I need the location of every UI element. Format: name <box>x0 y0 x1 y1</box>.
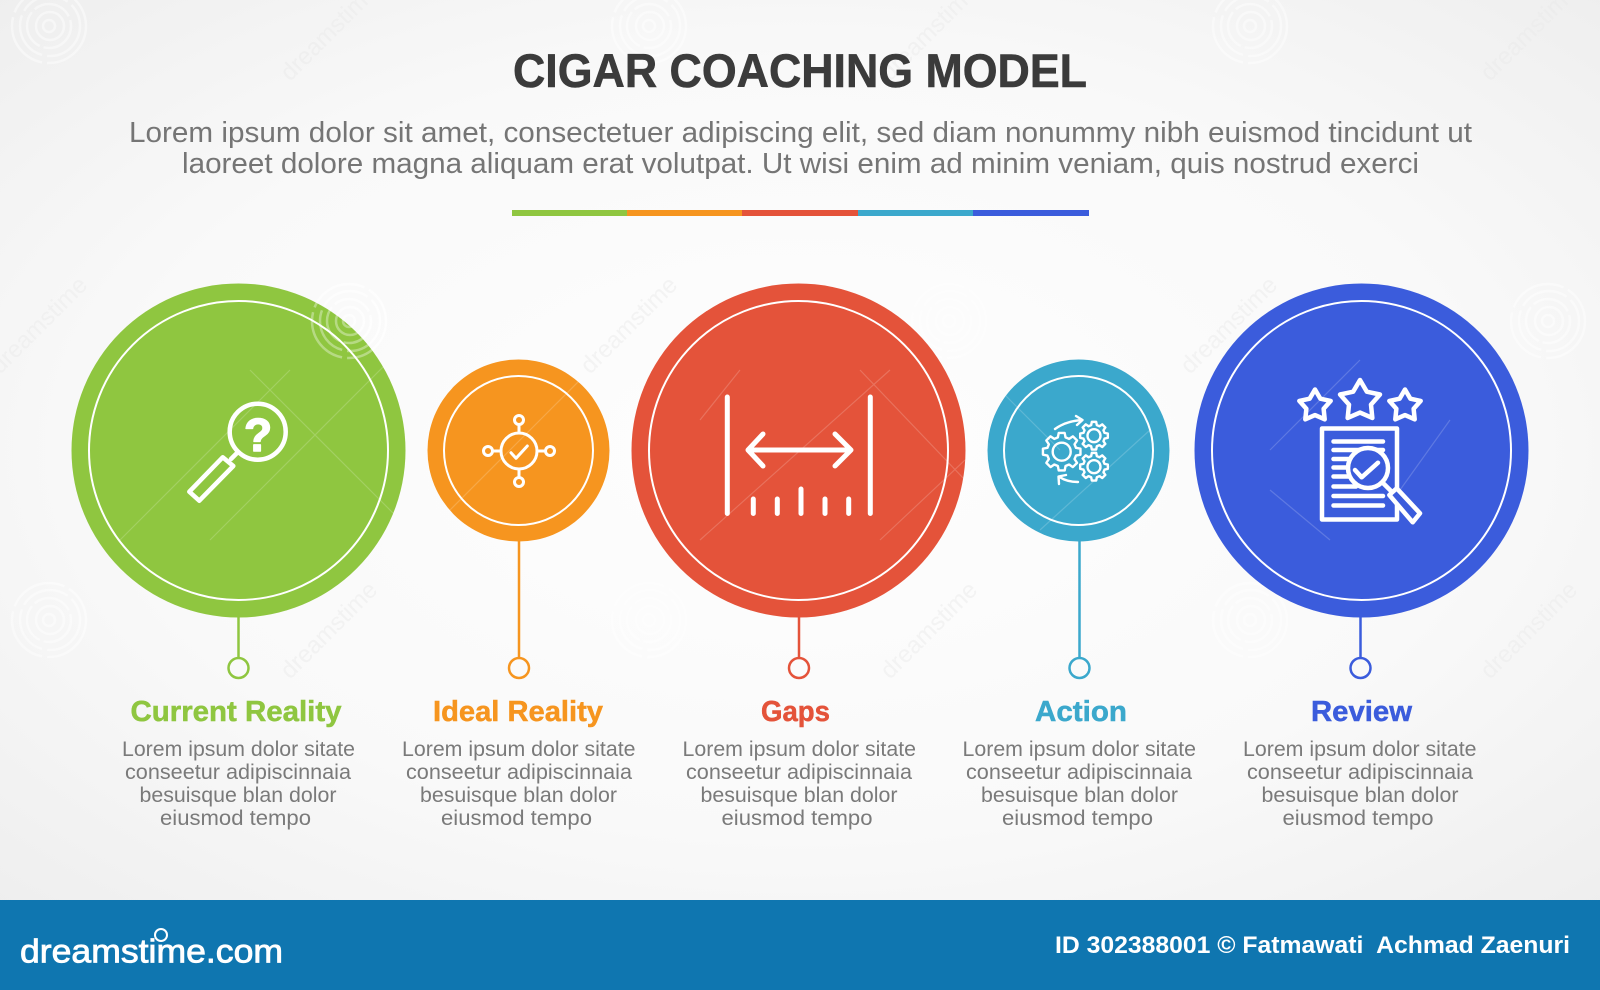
description: current reality: eiusmod tempo <box>160 806 311 830</box>
blue circle <box>1194 284 1528 618</box>
description: current reality: conseetur adipiscinnaia <box>125 760 351 784</box>
inner ring <box>1212 301 1511 600</box>
description: ideal reality <box>402 737 636 830</box>
description: action: conseetur adipiscinnaia <box>966 760 1192 784</box>
description: ideal reality: Lorem ipsum dolor sitate <box>402 737 636 761</box>
teal circle <box>988 360 1170 542</box>
icon: rated document review <box>1299 380 1421 522</box>
watermark pattern: dreamstime <box>275 576 383 684</box>
description: gaps: Lorem ipsum dolor sitate <box>682 737 916 761</box>
footer logo: dreamstime.com <box>20 932 283 970</box>
heading: current reality: Current Reality <box>130 696 342 728</box>
icon: hub with check mark <box>484 416 554 486</box>
icon: gap measure <box>727 397 870 514</box>
inner ring <box>649 301 948 600</box>
description: gaps: eiusmod tempo <box>722 806 873 830</box>
description: ideal reality: besuisque blan dolor <box>420 783 617 807</box>
connector and marker: gaps <box>789 600 809 678</box>
description: review: besuisque blan dolor <box>1262 783 1458 807</box>
heading: action: Action <box>1035 696 1127 728</box>
step 2: ideal reality <box>402 360 636 830</box>
description: review <box>1243 737 1476 830</box>
description: current reality: besuisque blan dolor <box>140 783 336 807</box>
title: CIGAR COACHING MODEL <box>513 44 1087 97</box>
description: review: eiusmod tempo <box>1282 806 1434 830</box>
description: review: Lorem ipsum dolor sitate <box>1243 737 1476 761</box>
step 4: action <box>962 360 1196 830</box>
watermark pattern: dreamstime <box>575 271 683 379</box>
heading: ideal reality: Ideal Reality <box>433 696 603 728</box>
inner ring <box>89 301 388 600</box>
watermark spiral on green circle <box>312 284 386 358</box>
icon: magnifier with question mark <box>189 404 286 501</box>
footer credit: ID 302388001 © Fatmawati Achmad Zaenuri <box>1055 932 1570 959</box>
subtitle <box>129 117 1472 180</box>
icon: magnifier with question mark: ? <box>244 409 272 461</box>
watermark pattern: dreamstime <box>875 576 983 684</box>
red circle <box>632 284 966 618</box>
description: gaps: besuisque blan dolor <box>700 783 898 807</box>
watermark pattern <box>0 0 1585 684</box>
watermark pattern: dreamstime <box>1475 576 1583 684</box>
description: current reality <box>122 737 355 830</box>
heading: review: Review <box>1311 696 1412 728</box>
heading: gaps: Gaps <box>761 696 830 728</box>
icon: rotating gears <box>1043 416 1108 484</box>
connector and marker: action <box>1070 530 1090 678</box>
description: action: Lorem ipsum dolor sitate <box>962 737 1196 761</box>
subtitle: laoreet dolore magna aliquam erat volutpat. Ut wisi enim ad minim veniam, quis nostrud exerci <box>182 148 1419 180</box>
green circle <box>72 284 406 618</box>
description: action: eiusmod tempo <box>1002 806 1153 830</box>
orange circle <box>428 360 610 542</box>
multicolour divider bar <box>512 210 1089 216</box>
inner ring <box>1004 376 1153 525</box>
connector and marker: ideal reality <box>509 530 529 678</box>
description: action: besuisque blan dolor <box>981 783 1178 807</box>
description: gaps: conseetur adipiscinnaia <box>686 760 912 784</box>
watermark pattern: dreamstime <box>1175 271 1283 379</box>
inner ring <box>444 376 593 525</box>
description: gaps <box>682 737 916 830</box>
subtitle: Lorem ipsum dolor sit amet, consectetuer adipiscing elit, sed diam nonummy nibh euismod tincidunt ut <box>129 117 1472 149</box>
footer band <box>0 900 1600 990</box>
description: action <box>962 737 1196 830</box>
connector and marker: review <box>1350 600 1370 678</box>
description: ideal reality: eiusmod tempo <box>441 806 592 830</box>
description: ideal reality: conseetur adipiscinnaia <box>406 760 632 784</box>
step 1: current reality <box>72 284 406 830</box>
step 5: review <box>1194 284 1528 830</box>
description: current reality: Lorem ipsum dolor sitate <box>122 737 355 761</box>
description: review: conseetur adipiscinnaia <box>1247 760 1473 784</box>
step 3: gaps <box>632 284 966 830</box>
circle watermark lines <box>120 350 1450 540</box>
connector and marker: current reality <box>228 600 248 678</box>
